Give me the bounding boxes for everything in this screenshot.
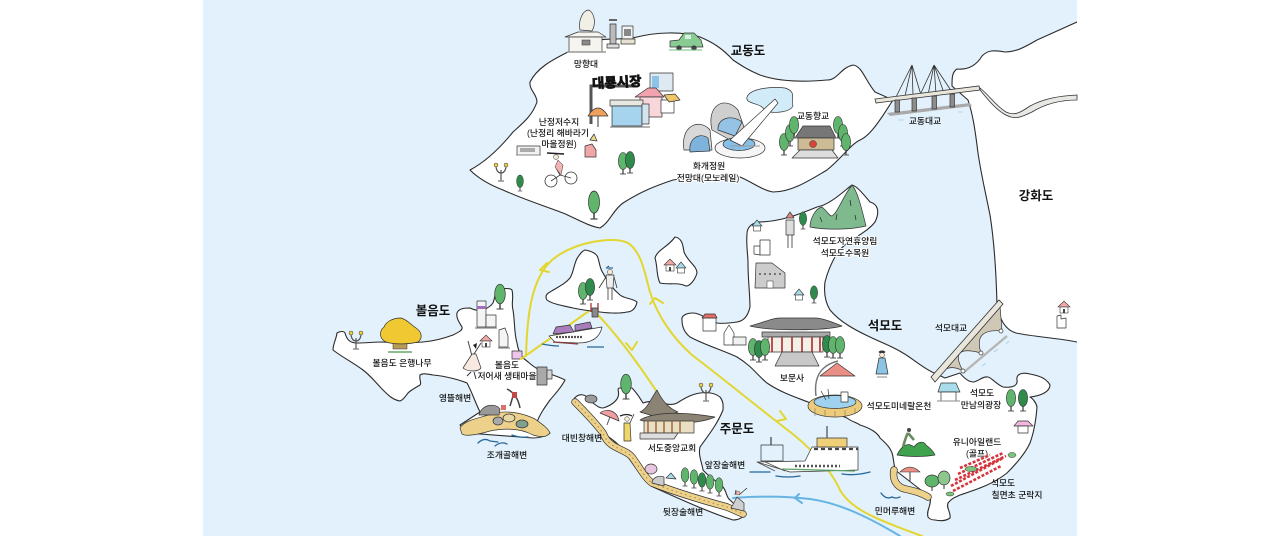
icon: row of trees [681, 468, 723, 496]
icon: cyclist [545, 153, 577, 187]
icon: 만남의광장 house [937, 383, 960, 401]
icon: car ferry [757, 426, 858, 472]
label: 석모도 만남의광장: 만남의광장 [961, 399, 1001, 410]
icon: 교동향교 shrine [779, 116, 851, 158]
icon: tree [517, 175, 523, 191]
label: 대룡시장 sign: 대룡시장 [592, 74, 643, 91]
icon: tall tree [588, 191, 600, 219]
icon: shells [645, 464, 676, 486]
waves: ferry [750, 472, 870, 477]
icon: pier [591, 303, 598, 317]
icon: 칠면초 red field [951, 453, 1006, 491]
bridge: 석모대교 [931, 300, 1009, 382]
beach: 대빈창 and 뒷장술 sand strip [575, 402, 743, 514]
label: 보문사: 보문사 [780, 373, 804, 383]
label: 석모도자연휴양림: 석모도수목원 [821, 248, 869, 258]
island: 볼음도 [333, 284, 565, 438]
label: 영뜰해변: 영뜰해변 [439, 392, 471, 403]
route: blue ferry line [733, 494, 900, 536]
icon: observation tower [607, 20, 635, 48]
label: 서도중앙교회: 서도중앙교회 [648, 442, 696, 453]
island: 교동도 [470, 10, 893, 228]
island: small north islet [655, 237, 697, 286]
label: 석모도 칠면초 군락지: 석모도 [991, 478, 1015, 488]
icon: pink pavilion [1014, 421, 1033, 433]
label: 볼음도: 볼음도 [416, 304, 450, 318]
icon: tree and statue [786, 212, 807, 248]
label: 석모도 만남의광장: 석모도 [970, 388, 994, 398]
icon: 보문사 temple [748, 318, 845, 366]
icon: pink house [585, 134, 597, 157]
icon: lamp [494, 163, 508, 181]
label: 석모대교: 석모대교 [935, 322, 967, 333]
icon: 볼음도 apartments [475, 301, 510, 348]
icon: round trees [925, 471, 950, 491]
icon: tree [495, 284, 505, 309]
icon: trees [1006, 390, 1028, 411]
island: 강화도 [951, 21, 1077, 342]
icon: rocks and shell gatherer [479, 389, 528, 428]
island: 석모도 [682, 185, 1050, 521]
icon: walker figure [599, 266, 617, 300]
label: 강화도: 강화도 [1019, 188, 1053, 203]
label: 난정저수지: (난정리 해바라기 [527, 127, 589, 138]
label: 석모도미네랄온천: 석모도미네랄온천 [867, 400, 931, 411]
icon: 망향대 stone and building [565, 10, 606, 52]
icon: 온천 hot spring [808, 361, 862, 417]
icon: 화개정원 glass domes and monorail tower [683, 99, 778, 158]
icon: golfer on hill [897, 428, 935, 456]
icon: green car [669, 33, 703, 50]
label: 유니아일랜드(골프): (골프) [966, 448, 988, 458]
label: 석모도자연휴양림: 석모도자연휴양림 [813, 236, 877, 246]
icon: islet houses [664, 259, 686, 273]
icon: house [480, 335, 492, 347]
sea background [203, 0, 1077, 536]
icon: 수목원 buildings [754, 240, 785, 288]
label: 볼음도 저어새 생태마을: 볼음도 [495, 360, 519, 370]
bridge: 교동대교 [875, 65, 1077, 120]
icon: 서도중앙교회 church [640, 390, 715, 439]
label: 민머루해변: 민머루해변 [875, 505, 915, 516]
icon: passenger boat [542, 322, 604, 347]
label: 난정저수지: 난정저수지 [539, 117, 579, 127]
beach: 조개골해변 [460, 412, 550, 437]
icon: small houses on 강화도 [1057, 301, 1070, 328]
label: 교동대교: 교동대교 [909, 115, 941, 126]
route: yellow ferry line [521, 240, 922, 536]
label: 교동도: 교동도 [731, 44, 765, 58]
icon: 석모도 forest mountain [810, 185, 866, 229]
icon: 휴양림 small house [752, 220, 762, 231]
icon: woman figure [620, 414, 634, 441]
label: 앞장술해변: 앞장술해변 [705, 459, 745, 470]
label: 석모도 칠면초 군락지: 칠면초 군락지 [991, 489, 1043, 500]
label: 난정저수지: 마을정원) [541, 138, 577, 149]
label: 유니아일랜드(골프): 유니아일랜드 [953, 437, 1001, 447]
label: 교동향교: 교동향교 [797, 111, 829, 121]
label: 주문도: 주문도 [720, 422, 754, 436]
icon: low grey building [516, 146, 541, 155]
icon: west houses [702, 314, 746, 345]
icon: 대룡시장 market [588, 73, 680, 127]
icon: 은행나무 ginkgo tree [380, 318, 421, 352]
icon: small house and tree [794, 286, 818, 303]
beach: 민머루해변 [894, 470, 928, 497]
icon: grey building [537, 367, 552, 385]
icon: lamp [699, 383, 713, 401]
icon: trees [578, 278, 595, 304]
label: 볼음도 은행나무: 볼음도 은행나무 [372, 357, 432, 368]
label: 뒷장술해변: 뒷장술해변 [663, 506, 703, 517]
waves: 조개골 [478, 435, 528, 446]
waves: 민머루 [881, 493, 900, 498]
icon: beach umbrella [900, 467, 920, 482]
icon: lamp [349, 331, 363, 349]
island: 서도 islet with walker [546, 250, 637, 317]
icon: dancer figure [463, 341, 481, 379]
label: 석모도: 석모도 [868, 319, 902, 333]
icon: tree [621, 374, 631, 399]
label: 조개골해변: 조개골해변 [487, 449, 527, 460]
label: 망향대: 망향대 [574, 58, 598, 69]
icon: green bushes [946, 452, 1016, 496]
icon: trees pair [618, 152, 635, 174]
icon: striped beach umbrella [600, 410, 619, 425]
icon: monk figure [876, 350, 888, 377]
label: 대빈창해변: 대빈창해변 [562, 432, 602, 443]
label: 화개정원 전망대: 화개정원 [693, 161, 725, 171]
icon: rock [585, 395, 597, 403]
icon: pink kiosk [512, 351, 522, 359]
island: 주문도 [562, 374, 754, 520]
icon: 화개정원 pond [747, 87, 793, 112]
label: 볼음도 저어새 생태마을: 저어새 생태마을 [477, 370, 537, 381]
label: 화개정원 전망대: 전망대(모노레일) [677, 172, 739, 183]
icon: fisher figure [731, 488, 747, 511]
